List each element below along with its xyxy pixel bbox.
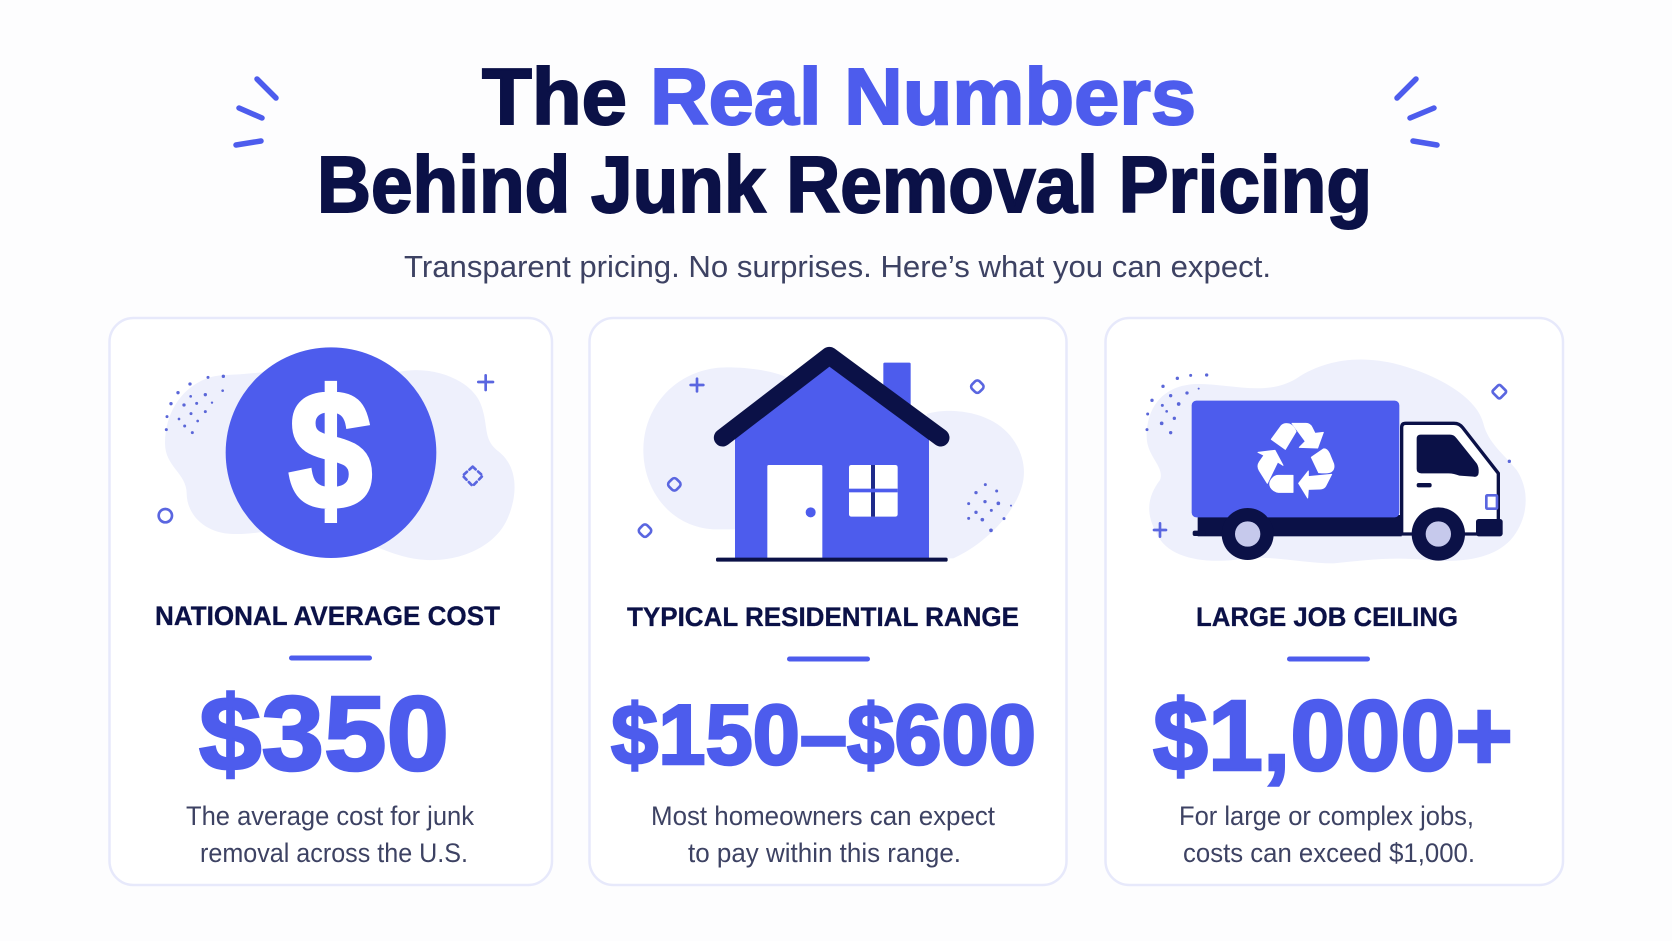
divider dash [289, 656, 372, 660]
icon: recycling symbol [1258, 423, 1334, 498]
panel: large job ceiling [1106, 318, 1563, 885]
icon: dollar coin [159, 347, 515, 560]
icon: left accent sparks [236, 79, 276, 145]
title: The [482, 52, 627, 141]
title: Behind Junk Removal Pricing [317, 140, 1372, 229]
description: removal across the U.S. [200, 838, 468, 868]
icon: dollar coin: $ [289, 356, 372, 544]
panel: national average cost [110, 318, 552, 885]
description [1179, 801, 1475, 868]
description: costs can exceed $1,000. [1183, 838, 1475, 868]
big number: $350 [199, 675, 449, 793]
label: TYPICAL RESIDENTIAL RANGE [627, 602, 1019, 632]
divider dash [1287, 656, 1370, 662]
title [317, 52, 1372, 229]
label: LARGE JOB CEILING [1196, 602, 1458, 632]
description: For large or complex jobs, [1179, 801, 1474, 831]
subtitle: Transparent pricing. No surprises. Here’s what you can expect. [404, 249, 1271, 284]
description: The average cost for junk [186, 801, 474, 831]
description [186, 801, 474, 868]
divider dash [787, 656, 870, 662]
big number: $1,000+ [1153, 680, 1513, 792]
description: to pay within this range. [688, 838, 961, 868]
panel: typical residential range [590, 318, 1066, 885]
description: Most homeowners can expect [651, 801, 995, 831]
icon: right accent sparks [1397, 79, 1437, 145]
icon: house [637, 356, 1024, 562]
description [651, 801, 995, 868]
label: NATIONAL AVERAGE COST [155, 601, 500, 631]
big number: $150–$600 [611, 688, 1036, 783]
icon: recycling truck [1145, 360, 1526, 563]
title: Real Numbers [650, 52, 1196, 141]
